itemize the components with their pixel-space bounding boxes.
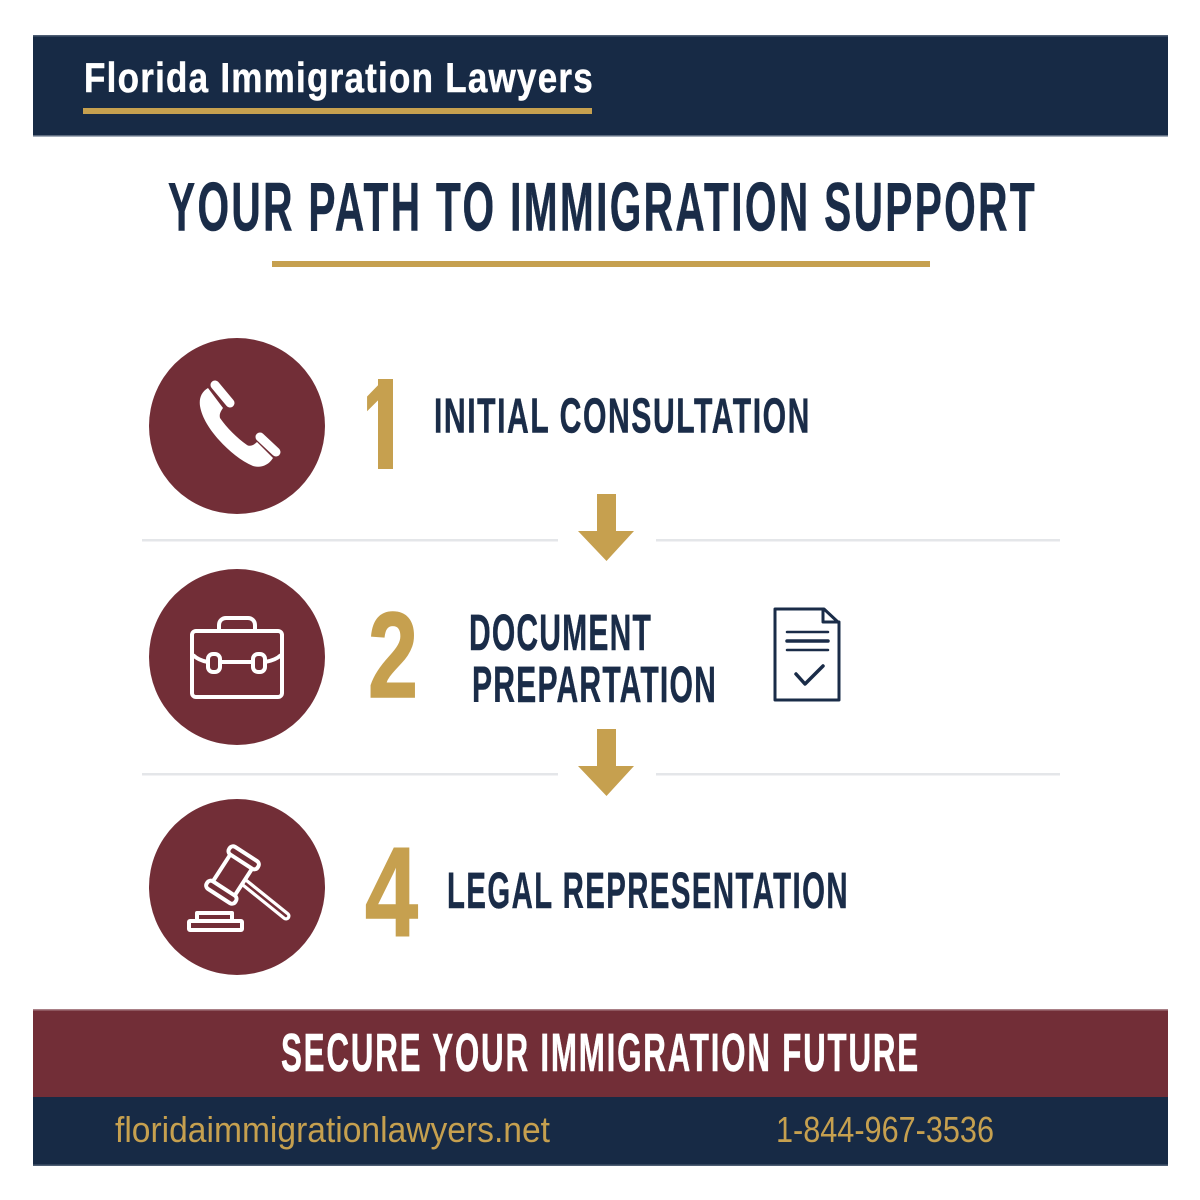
step 4: legal representation (149, 799, 849, 975)
step 1: initial consultation (149, 338, 811, 514)
step 4 label: LEGAL REPRESENTATION (447, 862, 849, 919)
step 2 label: PREPARTATION (472, 656, 717, 713)
step 2 label (469, 604, 717, 713)
arrow and divider 1 (142, 494, 1060, 561)
icon: gavel in circle (149, 799, 325, 975)
main title (168, 168, 1037, 267)
website: floridaimmigrationlawyers.net (115, 1109, 550, 1150)
number 1: 1 (362, 357, 406, 496)
footer call-to-action band (33, 1009, 1168, 1097)
firm name: Florida Immigration Lawyers (84, 54, 594, 101)
arrow and divider 2 (142, 729, 1060, 796)
step 1 label: INITIAL CONSULTATION (434, 390, 811, 444)
phone number: 1-844-967-3536 (776, 1109, 994, 1150)
icon: phone in circle (149, 338, 325, 514)
number 4: 4 (365, 821, 418, 963)
icon: document with check (775, 609, 839, 700)
firm name underline (83, 108, 592, 114)
step 2 label: DOCUMENT (469, 604, 652, 661)
step 2: document preparation (149, 569, 839, 745)
number 2: 2 (368, 587, 418, 723)
header banner (33, 35, 1168, 137)
icon: briefcase in circle (149, 569, 325, 745)
footer contact band (33, 1097, 1168, 1166)
number 1 (367, 379, 393, 469)
